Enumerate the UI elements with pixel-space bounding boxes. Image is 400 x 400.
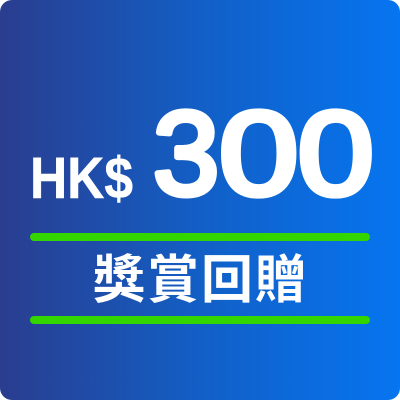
amount: 0 xyxy=(298,88,374,220)
top green bar xyxy=(30,233,370,241)
amount: 0 xyxy=(219,87,298,220)
currency label: HK$ xyxy=(30,146,133,211)
amount xyxy=(153,87,374,220)
amount: 3 xyxy=(153,88,219,220)
bottom green bar xyxy=(30,316,370,324)
reward caption: 獎賞回贈 xyxy=(93,252,309,310)
